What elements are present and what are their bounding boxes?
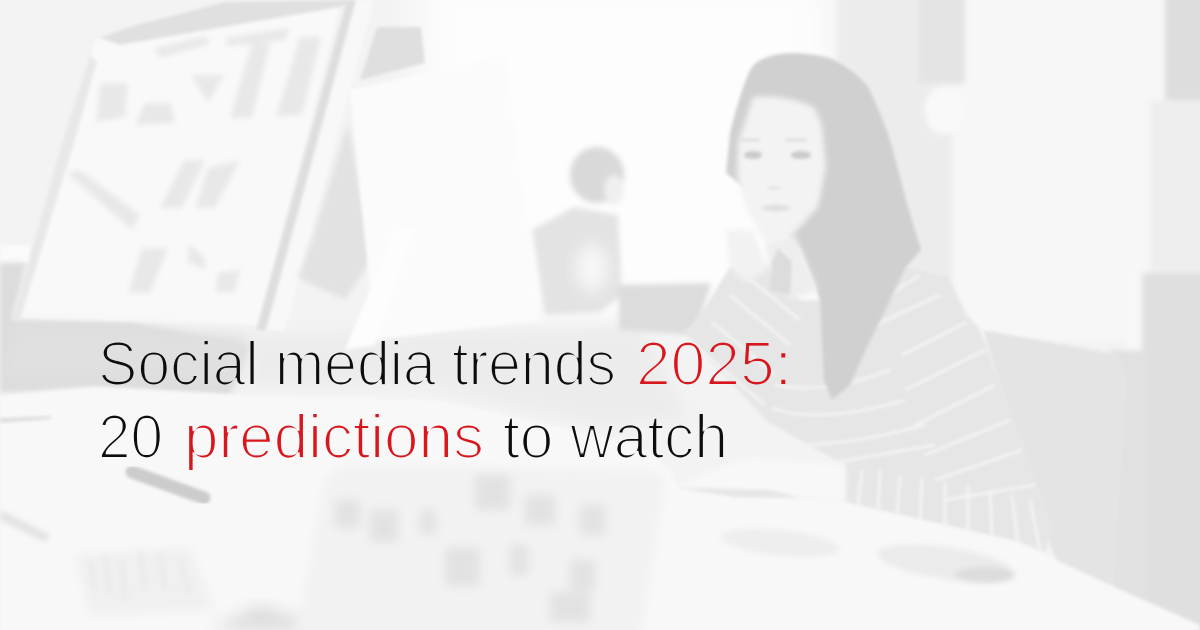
second white monitor bbox=[345, 55, 540, 350]
background desk shade bbox=[250, 325, 690, 425]
right columns bbox=[837, 0, 1200, 630]
pen bbox=[132, 472, 204, 498]
woman: collar bbox=[770, 248, 792, 295]
large monitor bbox=[12, 0, 374, 330]
chair bbox=[983, 330, 1127, 590]
woman: neck bbox=[765, 235, 818, 300]
line 1 red: 2025: bbox=[636, 330, 792, 399]
dark area behind monitors bbox=[360, 27, 425, 80]
line 2 end: to watch bbox=[503, 403, 728, 472]
paper charts on table bbox=[719, 524, 1015, 588]
woman: eyes, nose, mouth bbox=[740, 139, 811, 212]
table surface bbox=[0, 387, 1200, 630]
background person: blurred arm bbox=[576, 244, 608, 292]
left desk objects bbox=[0, 416, 330, 630]
line 2 number: 20 bbox=[98, 403, 163, 472]
woman: hand at cheek bbox=[726, 230, 768, 282]
woman: sweater bbox=[684, 265, 1052, 552]
monitor screen blurred content bbox=[67, 28, 321, 293]
woman: hair bbox=[726, 53, 921, 400]
line 2 red: predictions bbox=[184, 403, 484, 472]
light ledge on wall bbox=[0, 245, 30, 263]
woman: hand on table bbox=[680, 458, 845, 502]
monitor base shade bbox=[5, 325, 250, 385]
dark area below monitor bbox=[0, 263, 250, 395]
background person bbox=[532, 147, 711, 335]
woman: face bbox=[737, 96, 826, 243]
headline bbox=[98, 330, 792, 472]
tablet with thumbnails bbox=[295, 465, 665, 630]
window light area bbox=[420, 0, 830, 320]
line 1 dark: Social media trends bbox=[98, 330, 616, 399]
